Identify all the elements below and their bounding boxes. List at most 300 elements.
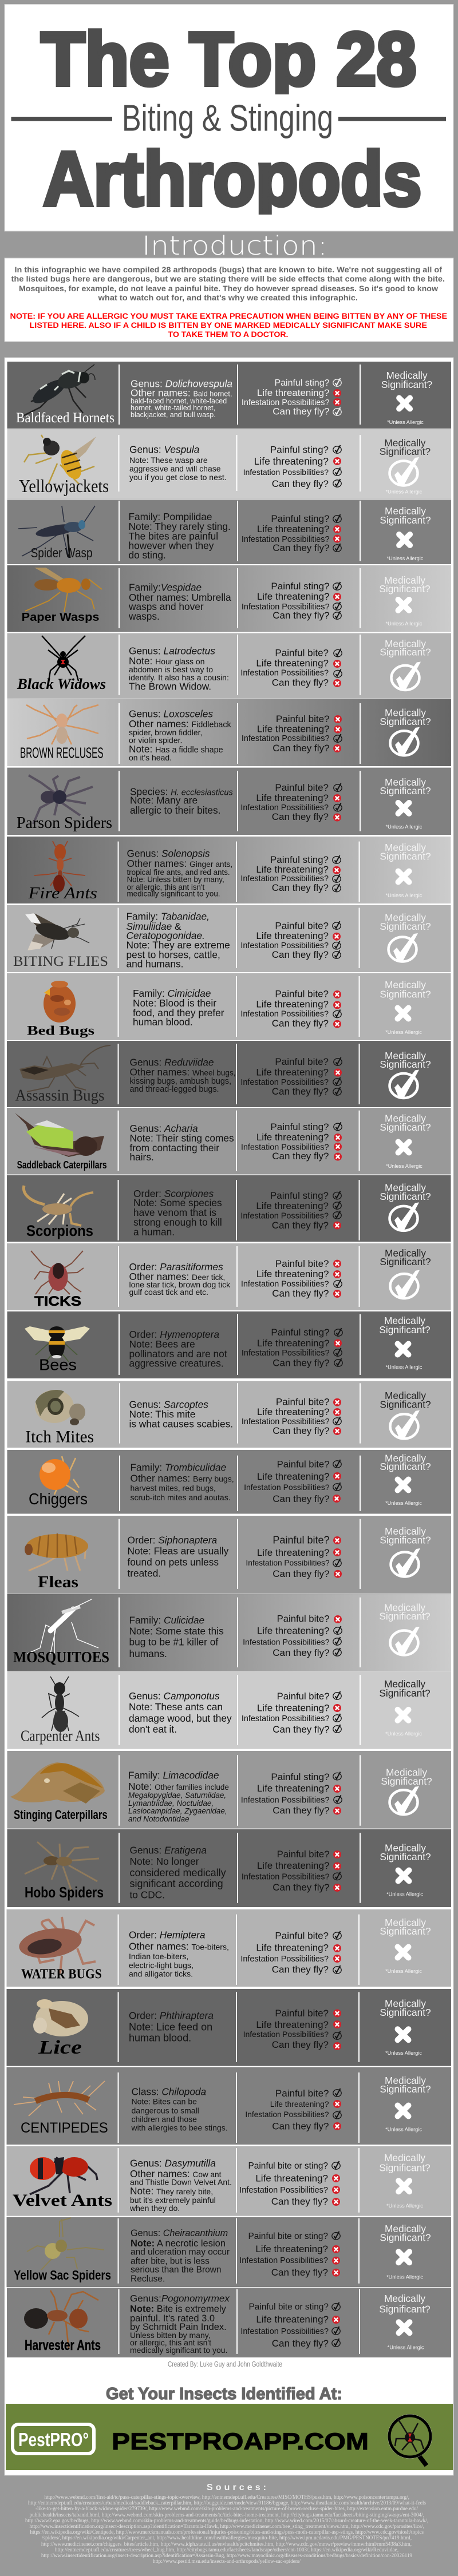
medically significant: no: *Unless Allergic — [385, 2127, 422, 2133]
checklist: Painful sting? — [271, 1327, 330, 1338]
taxonomy note — [133, 988, 224, 1028]
taxonomy note: Genus: Solenopsis — [127, 848, 210, 859]
taxonomy note: Note: Bite is extremely — [130, 2304, 227, 2315]
taxonomy note: Recluse. — [131, 2274, 165, 2284]
icon: itch mite — [35, 1390, 85, 1425]
taxonomy note: Simuliidae & — [126, 921, 181, 932]
subtitle with rules: Biting & Stinging — [122, 97, 333, 138]
taxonomy note: Genus: Sarcoptes — [129, 1399, 208, 1410]
taxonomy note — [131, 2086, 228, 2132]
medically significant: no: Medically — [385, 2075, 426, 2086]
taxonomy note: painful. It's rated 3.0 — [130, 2313, 215, 2324]
sources list: http://www.insectidentification.org/insect-description.asp?identification=Tarantula-Hawk, http://www.medicinenet.com/bee_sting_treatment/views.htm, http://www.cdc.gov/parasites/lice/, — [30, 2523, 424, 2530]
icon: scorpion — [23, 1186, 93, 1226]
medically significant: yes — [380, 707, 431, 756]
taxonomy note: Other names: Berry bugs, — [131, 1473, 234, 1484]
name: Ticks: TICKS — [34, 1294, 81, 1309]
medically significant: no: Significant? — [380, 1925, 431, 1937]
checklist — [244, 1459, 341, 1504]
sources list — [25, 2494, 428, 2565]
taxonomy note: Other names: Bald hornet, — [131, 387, 232, 399]
checklist: Infestation Possibilities? — [243, 467, 329, 477]
checklist: Life threatening? — [256, 930, 329, 941]
taxonomy note: Order: Hymenoptera — [129, 1329, 219, 1340]
checklist: Can they fly? — [272, 1151, 329, 1162]
taxonomy note: is what causes scabies. — [129, 1418, 233, 1430]
taxonomy note — [128, 1769, 229, 1823]
taxonomy note: electric-light bugs, — [129, 1960, 194, 1969]
medically significant: yes: Significant? — [380, 716, 431, 727]
checklist: Infestation Possibilities? — [241, 1143, 329, 1152]
name: Scorpions: Scorpions — [26, 1222, 93, 1239]
checklist — [239, 2232, 340, 2278]
checklist: Painful bite? — [277, 1691, 330, 1702]
name: Mosquitoes: MOSQUITOES — [13, 1648, 109, 1666]
medically significant: no: Significant? — [380, 850, 431, 862]
medically significant: yes — [380, 1390, 431, 1439]
medically significant: no: Significant? — [379, 1687, 431, 1699]
row: Fire Ants — [7, 837, 451, 903]
taxonomy note: Note: Lice feed on — [129, 2021, 212, 2032]
sources list: http://www.pestid.msu.edu/insects-and-arthropods/yellow-sac-spiders/ — [153, 2559, 301, 2565]
sources list: http://www.medicinenet.com/chiggers_bites/article.htm, http://www.idph.state.il.us/envhealth/pcitchmites.htm, http://www.cdc.gov/mmwr/preview/mmwrhtml/mm5438a3.htm, — [41, 2542, 412, 2547]
checklist: Life threatening? — [256, 658, 329, 669]
icon: hornet — [22, 364, 95, 417]
taxonomy note: aggressive creatures. — [129, 1358, 224, 1369]
row: Brown Recluses — [7, 699, 451, 766]
icon: yellow sac spider — [27, 2218, 104, 2270]
checklist: Life threatening? — [254, 455, 329, 467]
sources list: https://en.wikipedia.org/wiki/Centipede, http://www.merckmanuals.com/professional/injuries-poisoning/bites-and-stings/puss-moth-caterpillar-asp-stings, http://www.cdc.gov/niosh/topics — [30, 2529, 424, 2535]
checklist: Can they fly? — [273, 542, 330, 553]
checklist — [240, 1931, 341, 1975]
taxonomy note: Genus: Vespula — [129, 444, 200, 455]
taxonomy note: Note: These ants can — [129, 1701, 223, 1713]
name: Yellow Sac Spiders: Yellow Sac Spiders — [14, 2268, 111, 2282]
checklist: Infestation Possibilities? — [241, 1279, 329, 1289]
checklist: Infestation Possibilities? — [242, 398, 330, 407]
icon: yellowjacket — [24, 435, 96, 484]
icon: saddleback caterpillar — [15, 1113, 104, 1157]
checklist — [243, 1614, 342, 1658]
row: Paper Wasps — [7, 565, 451, 632]
taxonomy note: however when they — [128, 540, 214, 552]
logo: PestPRO badge — [13, 2424, 94, 2454]
medically significant: no — [380, 1917, 431, 1974]
taxonomy note: do sting. — [128, 549, 166, 561]
name: Hobo Spiders: Hobo Spiders — [25, 1884, 104, 1901]
medically significant: yes: Significant? — [380, 1399, 431, 1410]
checklist: Can they fly? — [272, 1086, 329, 1097]
name: Brown Recluses: BROWN RECLUSES — [20, 744, 104, 761]
checklist: Infestation Possibilities? — [240, 1010, 329, 1019]
taxonomy note: Note: They rarely sting. — [128, 521, 231, 532]
taxonomy note — [129, 1123, 234, 1163]
taxonomy note — [127, 848, 232, 898]
medically significant: no — [380, 2223, 431, 2280]
medically significant: no — [379, 2293, 431, 2351]
checklist: Can they fly? — [273, 1647, 330, 1658]
icon: velvet ant — [30, 2157, 97, 2194]
checklist: Painful bite or sting? — [248, 2232, 328, 2241]
icon: mosquito — [27, 1599, 98, 1654]
taxonomy note: on it's head. — [129, 753, 172, 762]
taxonomy note — [128, 581, 231, 622]
row: Stinging Caterpillars — [7, 1751, 451, 1829]
panel: title — [5, 5, 453, 231]
checklist: Painful bite or sting? — [249, 2302, 329, 2312]
taxonomy note — [129, 1057, 236, 1094]
medically significant: no: Significant? — [379, 2304, 431, 2315]
checklist: Infestation Possibilities? — [240, 669, 329, 678]
name: Harvester Ants: Harvester Ants — [25, 2337, 101, 2353]
checklist: Can they fly? — [272, 1220, 329, 1231]
checklist: Painful bite? — [276, 714, 330, 724]
checklist: Can they fly? — [273, 1357, 330, 1369]
taxonomy note: Genus: Loxosceles — [129, 708, 213, 720]
medically significant: no: Medically — [385, 2223, 426, 2234]
taxonomy note: bug to be #1 killer of — [129, 1636, 218, 1648]
checklist: Infestation Possibilities? — [242, 603, 330, 612]
taxonomy note: Note: They rarely bite, — [130, 2185, 213, 2197]
checklist: Can they fly? — [273, 1568, 330, 1579]
taxonomy note: Note: Hour glass on — [129, 655, 205, 667]
medically significant: no: Medically — [385, 505, 426, 517]
medically significant: no: Significant? — [380, 514, 431, 526]
checklist: Life threatening? — [256, 1132, 329, 1143]
taxonomy note: Family: Trombiculidae — [131, 1461, 226, 1473]
row: Saddleback Caterpillars — [7, 1108, 451, 1174]
name: Fleas: Fleas — [38, 1574, 78, 1591]
taxonomy note: food, and they prefer — [133, 1007, 224, 1018]
medically significant: yes: Significant? — [380, 1256, 431, 1267]
checklist: Can they fly? — [272, 1964, 329, 1975]
checklist: Infestation Possibilities? — [243, 2030, 329, 2039]
checklist: Life threatening? — [256, 1200, 329, 1211]
taxonomy note: Note: They are extreme — [126, 940, 230, 951]
medically significant: no: *Unless Allergic — [387, 419, 424, 425]
medically significant: no: Significant? — [379, 2162, 431, 2174]
checklist: Can they fly? — [272, 949, 329, 960]
name: Bed Bugs: Bed Bugs — [27, 1024, 94, 1038]
row: Bees — [7, 1311, 451, 1378]
checklist: Infestation Possibilities? — [240, 2327, 329, 2336]
medically significant: no: Medically — [385, 1452, 426, 1464]
taxonomy note: hairs. — [129, 1151, 154, 1163]
taxonomy note: to CDC. — [129, 1889, 165, 1901]
icon: assassin bug — [19, 1045, 110, 1092]
taxonomy note: or violin spider. — [129, 736, 182, 745]
taxonomy note: from contacting their — [129, 1142, 219, 1154]
icon: harvester ant — [24, 2290, 98, 2349]
taxonomy note: Other names: Toe-biters, — [129, 1941, 229, 1952]
checklist: Painful bite? — [275, 2088, 329, 2099]
medically significant: yes — [380, 912, 431, 962]
checklist: Life threatening? — [257, 1471, 330, 1482]
checklist — [240, 854, 341, 893]
taxonomy note: bald-faced hornet, white-faced — [131, 397, 227, 405]
checklist: Infestation Possibilities? — [245, 2110, 329, 2119]
taxonomy note: harvest mites, red bugs, — [131, 1484, 216, 1493]
checklist: Can they fly? — [272, 478, 329, 489]
taxonomy note — [130, 2293, 230, 2355]
medically significant: no: Medically — [385, 979, 426, 990]
taxonomy note: Order: Parasitiformes — [129, 1261, 223, 1273]
row: Yellow Sac Spiders — [7, 2217, 451, 2287]
taxonomy note — [131, 1461, 234, 1502]
medically significant: no — [379, 1315, 431, 1370]
icon: centipede — [14, 2081, 105, 2116]
taxonomy note: don't eat it. — [129, 1723, 177, 1735]
medically significant: no: *Unless Allergic — [386, 1364, 423, 1370]
medically significant: no: *Unless Allergic — [386, 1892, 423, 1897]
icon: spider wasp — [18, 506, 95, 558]
taxonomy note: Family: Limacodidae — [128, 1769, 219, 1781]
taxonomy note — [129, 1845, 226, 1901]
name: Yellowjackets: Yellowjackets — [19, 475, 109, 496]
checklist: Life threatening? — [257, 1547, 330, 1558]
checklist — [242, 1849, 341, 1893]
checklist: Painful sting? — [270, 854, 329, 865]
row: Bed Bugs — [7, 973, 451, 1040]
row: Itch Mites — [7, 1381, 451, 1448]
taxonomy note — [129, 1329, 227, 1369]
icon: brown recluse — [26, 705, 98, 744]
logo: PestPRO badge: PestPRO° — [18, 2429, 89, 2450]
checklist: Infestation Possibilities? — [242, 535, 330, 544]
taxonomy note: Order: Scorpiones — [133, 1188, 214, 1199]
taxonomy note: after bite, but is less — [131, 2257, 210, 2266]
checklist: Infestation Possibilities? — [242, 1872, 330, 1881]
taxonomy note: scrub-itch mites and aoutas. — [131, 1493, 231, 1502]
taxonomy note: Other names: Cow ant — [130, 2168, 222, 2179]
checklist — [240, 2302, 340, 2349]
row: Scorpions — [7, 1175, 451, 1242]
taxonomy note — [129, 444, 227, 482]
checklist: Life threatening? — [257, 1406, 330, 1417]
taxonomy note: children and those — [132, 2115, 197, 2124]
checklist: Infestation Possibilities? — [244, 1483, 330, 1492]
taxonomy note: damage wood, but they — [129, 1713, 232, 1724]
taxonomy note: hornet, white-tailed hornet, — [131, 404, 215, 412]
medically significant: no: *Unless Allergic — [386, 824, 423, 830]
taxonomy note: Indian toe-biters, — [129, 1952, 188, 1961]
taxonomy note: by Schmidt Pain Index. — [130, 2322, 227, 2332]
checklist: Can they fly? — [272, 882, 329, 893]
icon: fire ant — [34, 841, 85, 892]
medically significant: yes — [379, 1602, 431, 1655]
taxonomy note: medically significant to you. — [127, 890, 220, 898]
medically significant: no: Significant? — [380, 2083, 431, 2095]
name: Itch Mites: Itch Mites — [25, 1428, 94, 1446]
medically significant: yes: Medically — [385, 707, 426, 719]
checklist: Painful bite? — [275, 989, 329, 1000]
name: Fire Ants: Fire Ants — [27, 885, 97, 902]
medically significant: no: Significant? — [379, 1324, 431, 1335]
row: Water Bugs — [7, 1909, 451, 1987]
checklist — [240, 1056, 342, 1097]
taxonomy note — [129, 708, 231, 762]
taxonomy note: aggressive and will chase — [129, 464, 221, 473]
checklist: Can they fly? — [273, 610, 330, 621]
checklist: Life threatening? — [256, 864, 329, 875]
taxonomy note: Genus: Camponotus — [129, 1690, 220, 1702]
taxonomy note — [129, 1690, 232, 1735]
checklist: Can they fly? — [272, 1288, 329, 1299]
taxonomy note — [131, 2228, 230, 2284]
taxonomy note: abdomen is best way to — [129, 665, 213, 674]
taxonomy note: Unless bitten by many, — [130, 2331, 211, 2340]
checklist: Life threatening? — [257, 1338, 330, 1349]
icon: louse — [33, 1999, 88, 2036]
icon: water bug — [17, 1917, 96, 1973]
medically significant: no — [380, 1113, 431, 1169]
taxonomy note — [129, 1399, 233, 1430]
name: Spider Wasp: Spider Wasp — [31, 545, 93, 560]
title line 1: The Top 28 — [41, 17, 417, 101]
medically significant: no: Medically — [384, 2293, 425, 2304]
website address: PESTPROAPP.COM — [112, 2428, 369, 2455]
checklist: Life threatening? — [256, 2314, 329, 2325]
medically significant: yes: Medically — [385, 1390, 426, 1401]
medically significant: no: *Unless Allergic — [385, 1968, 422, 1974]
name: Bees: Bees — [39, 1356, 77, 1373]
medically significant: yes: Significant? — [379, 1611, 431, 1622]
medically significant: no: Medically — [385, 1998, 426, 2010]
checklist: Life threatening? — [257, 387, 330, 398]
taxonomy note: lone star tick, brown dog tick — [129, 1280, 231, 1289]
medically significant: yes: Significant? — [380, 1535, 431, 1546]
name: Chiggers: Chiggers — [29, 1490, 88, 1508]
checklist: Can they fly? — [272, 1018, 329, 1029]
row: Centipedes — [7, 2067, 451, 2145]
sources list: http://entnemdept.ufl.edu/creatures/trees/wheel_bug.htm, http://citybugs.tamu.edu/factsheets/landscape/others/ent-1003/, https://en.wikipedia.org/wiki/Reduviidae, — [55, 2547, 398, 2553]
checklist: Can they fly? — [273, 1425, 330, 1436]
medically significant: yes — [381, 1766, 432, 1815]
checklist: Can they fly? — [273, 1493, 330, 1504]
checklist: Painful bite? — [275, 648, 329, 659]
checklist — [241, 1772, 342, 1816]
checklist: Can they fly? — [273, 1882, 330, 1893]
checklist: Infestation Possibilities? — [240, 941, 329, 950]
checklist — [240, 648, 342, 688]
name: Stinging Caterpillars: Stinging Caterpillars — [14, 1808, 108, 1822]
checklist — [240, 1190, 341, 1231]
taxonomy note: you if you get close to nest. — [129, 473, 227, 482]
checklist: Painful sting? — [270, 1190, 329, 1201]
checklist: Life threatening? — [257, 1626, 330, 1636]
medically significant: no: Significant? — [380, 1851, 431, 1862]
checklist: Painful sting? — [274, 378, 330, 388]
taxonomy note — [127, 1535, 229, 1579]
checklist: Painful bite? — [275, 782, 329, 793]
heading: introduction: Introduction: — [142, 231, 327, 261]
medically significant: yes: Medically — [385, 1050, 426, 1061]
medically significant: no: Medically — [384, 574, 425, 586]
taxonomy note: or allergic, this ant isn't — [130, 2338, 211, 2347]
allergy warning: LISTED HERE. ALSO IF A CHILD IS BITTEN BY ONE MARKED MEDICALLY SIGNIFICANT MAKE SURE — [30, 321, 427, 330]
checklist: Infestation Possibilities? — [240, 1955, 329, 1964]
checklist: Infestation Possibilities? — [242, 1417, 330, 1426]
checklist — [242, 1397, 341, 1436]
icon: biting fly — [25, 913, 89, 950]
medically significant: yes: Significant? — [380, 1059, 431, 1070]
medically significant: no — [379, 574, 431, 627]
icon: paper wasp — [25, 568, 102, 612]
taxonomy note: considered medically — [129, 1867, 226, 1879]
checklist: Painful sting? — [271, 1772, 330, 1782]
taxonomy note: Note: Many are — [130, 795, 198, 806]
medically significant: yes: Significant? — [381, 1776, 432, 1787]
name: Black Widows: Black Widows — [17, 676, 106, 692]
checklist: Can they fly? — [273, 1805, 330, 1816]
taxonomy note: and humans. — [126, 958, 183, 970]
taxonomy note: medically significant to you. — [130, 2345, 227, 2355]
checklist — [243, 2008, 341, 2050]
checklist: Infestation Possibilities? — [239, 2186, 328, 2195]
taxonomy note — [129, 2010, 214, 2044]
checklist — [241, 1258, 342, 1299]
taxonomy note: dangerous to small — [132, 2106, 199, 2115]
medically significant: yes: Significant? — [380, 446, 431, 457]
sources list: -like-to-get-bitten-by-a-black-widow-spider/279739/, http://www.webmd.com/skin-problems-and-treatments/picture-of-brown-recluse-spider-bites, http://extension.entm.purdue.edu/ — [35, 2506, 418, 2512]
taxonomy note: Note: Some species — [133, 1197, 222, 1208]
intro paragraph — [11, 265, 445, 302]
icon: chigger — [40, 1456, 79, 1495]
taxonomy note: Family: Cimicidae — [133, 988, 211, 999]
taxonomy note: blackjacket, and bull wasp. — [131, 411, 216, 419]
checklist — [242, 513, 341, 553]
checklist: Painful bite? — [276, 1397, 330, 1408]
taxonomy note: treated. — [127, 1568, 161, 1579]
medically significant: no — [380, 1998, 431, 2056]
allergy warning: NOTE: IF YOU ARE ALLERGIC YOU MUST TAKE EXTRA PRECAUTION WHEN BEING BITTEN BY ANY OF THESE — [10, 312, 447, 320]
checklist: Infestation Possibilities? — [241, 1796, 330, 1805]
checklist: Infestation Possibilities? — [240, 1078, 329, 1087]
medically significant: no: Significant? — [380, 2232, 431, 2244]
subtitle with rules — [11, 97, 446, 138]
medically significant: no: Significant? — [381, 379, 432, 390]
taxonomy note: Class: Chilopoda — [132, 2086, 207, 2098]
medically significant: no: *Unless Allergic — [387, 556, 424, 561]
row: Hobo Spiders — [7, 1829, 451, 1907]
checklist: Infestation Possibilities? — [243, 1638, 330, 1647]
sources list: http://www.webmd.com/first-aid/tc/puss-caterpillar-stings-topic-overview, http://entnemdept.ufl.edu/Creatures/MISC/MOTHS/puss.htm, http://www.poisoncentertampa.org/, — [45, 2494, 409, 2500]
checklist: Infestation Possibilities? — [242, 1714, 330, 1723]
checklist — [243, 444, 341, 489]
taxonomy note: Family: Culicidae — [129, 1615, 204, 1626]
name: Assassin Bugs: Assassin Bugs — [15, 1087, 104, 1104]
taxonomy note: wasps. — [128, 611, 160, 622]
checklist: Infestation Possibilities? — [246, 1559, 330, 1567]
taxonomy note: Note: Bites can be — [132, 2097, 197, 2106]
checklist — [245, 2088, 341, 2132]
taxonomy note: gulf coast tick and etc. — [129, 1287, 208, 1297]
checklist: Life threatening? — [256, 999, 329, 1010]
taxonomy note: but it's extremely painful — [130, 2195, 216, 2205]
taxonomy note: Genus: Acharia — [129, 1123, 198, 1134]
taxonomy note: found on pets unless — [127, 1556, 219, 1568]
icon: bed bug — [44, 981, 76, 1023]
checklist: Life threatening? — [255, 2244, 328, 2254]
medically significant: no — [380, 776, 431, 830]
name: Biting Flies: BITING FLIES — [13, 954, 108, 969]
medically significant: yes: Medically — [384, 1602, 425, 1613]
taxonomy note: wasps and hover — [128, 601, 204, 612]
checklist: Painful bite? — [275, 1056, 329, 1067]
checklist: Painful sting? — [271, 581, 330, 592]
medically significant: no: Significant? — [380, 1121, 431, 1133]
